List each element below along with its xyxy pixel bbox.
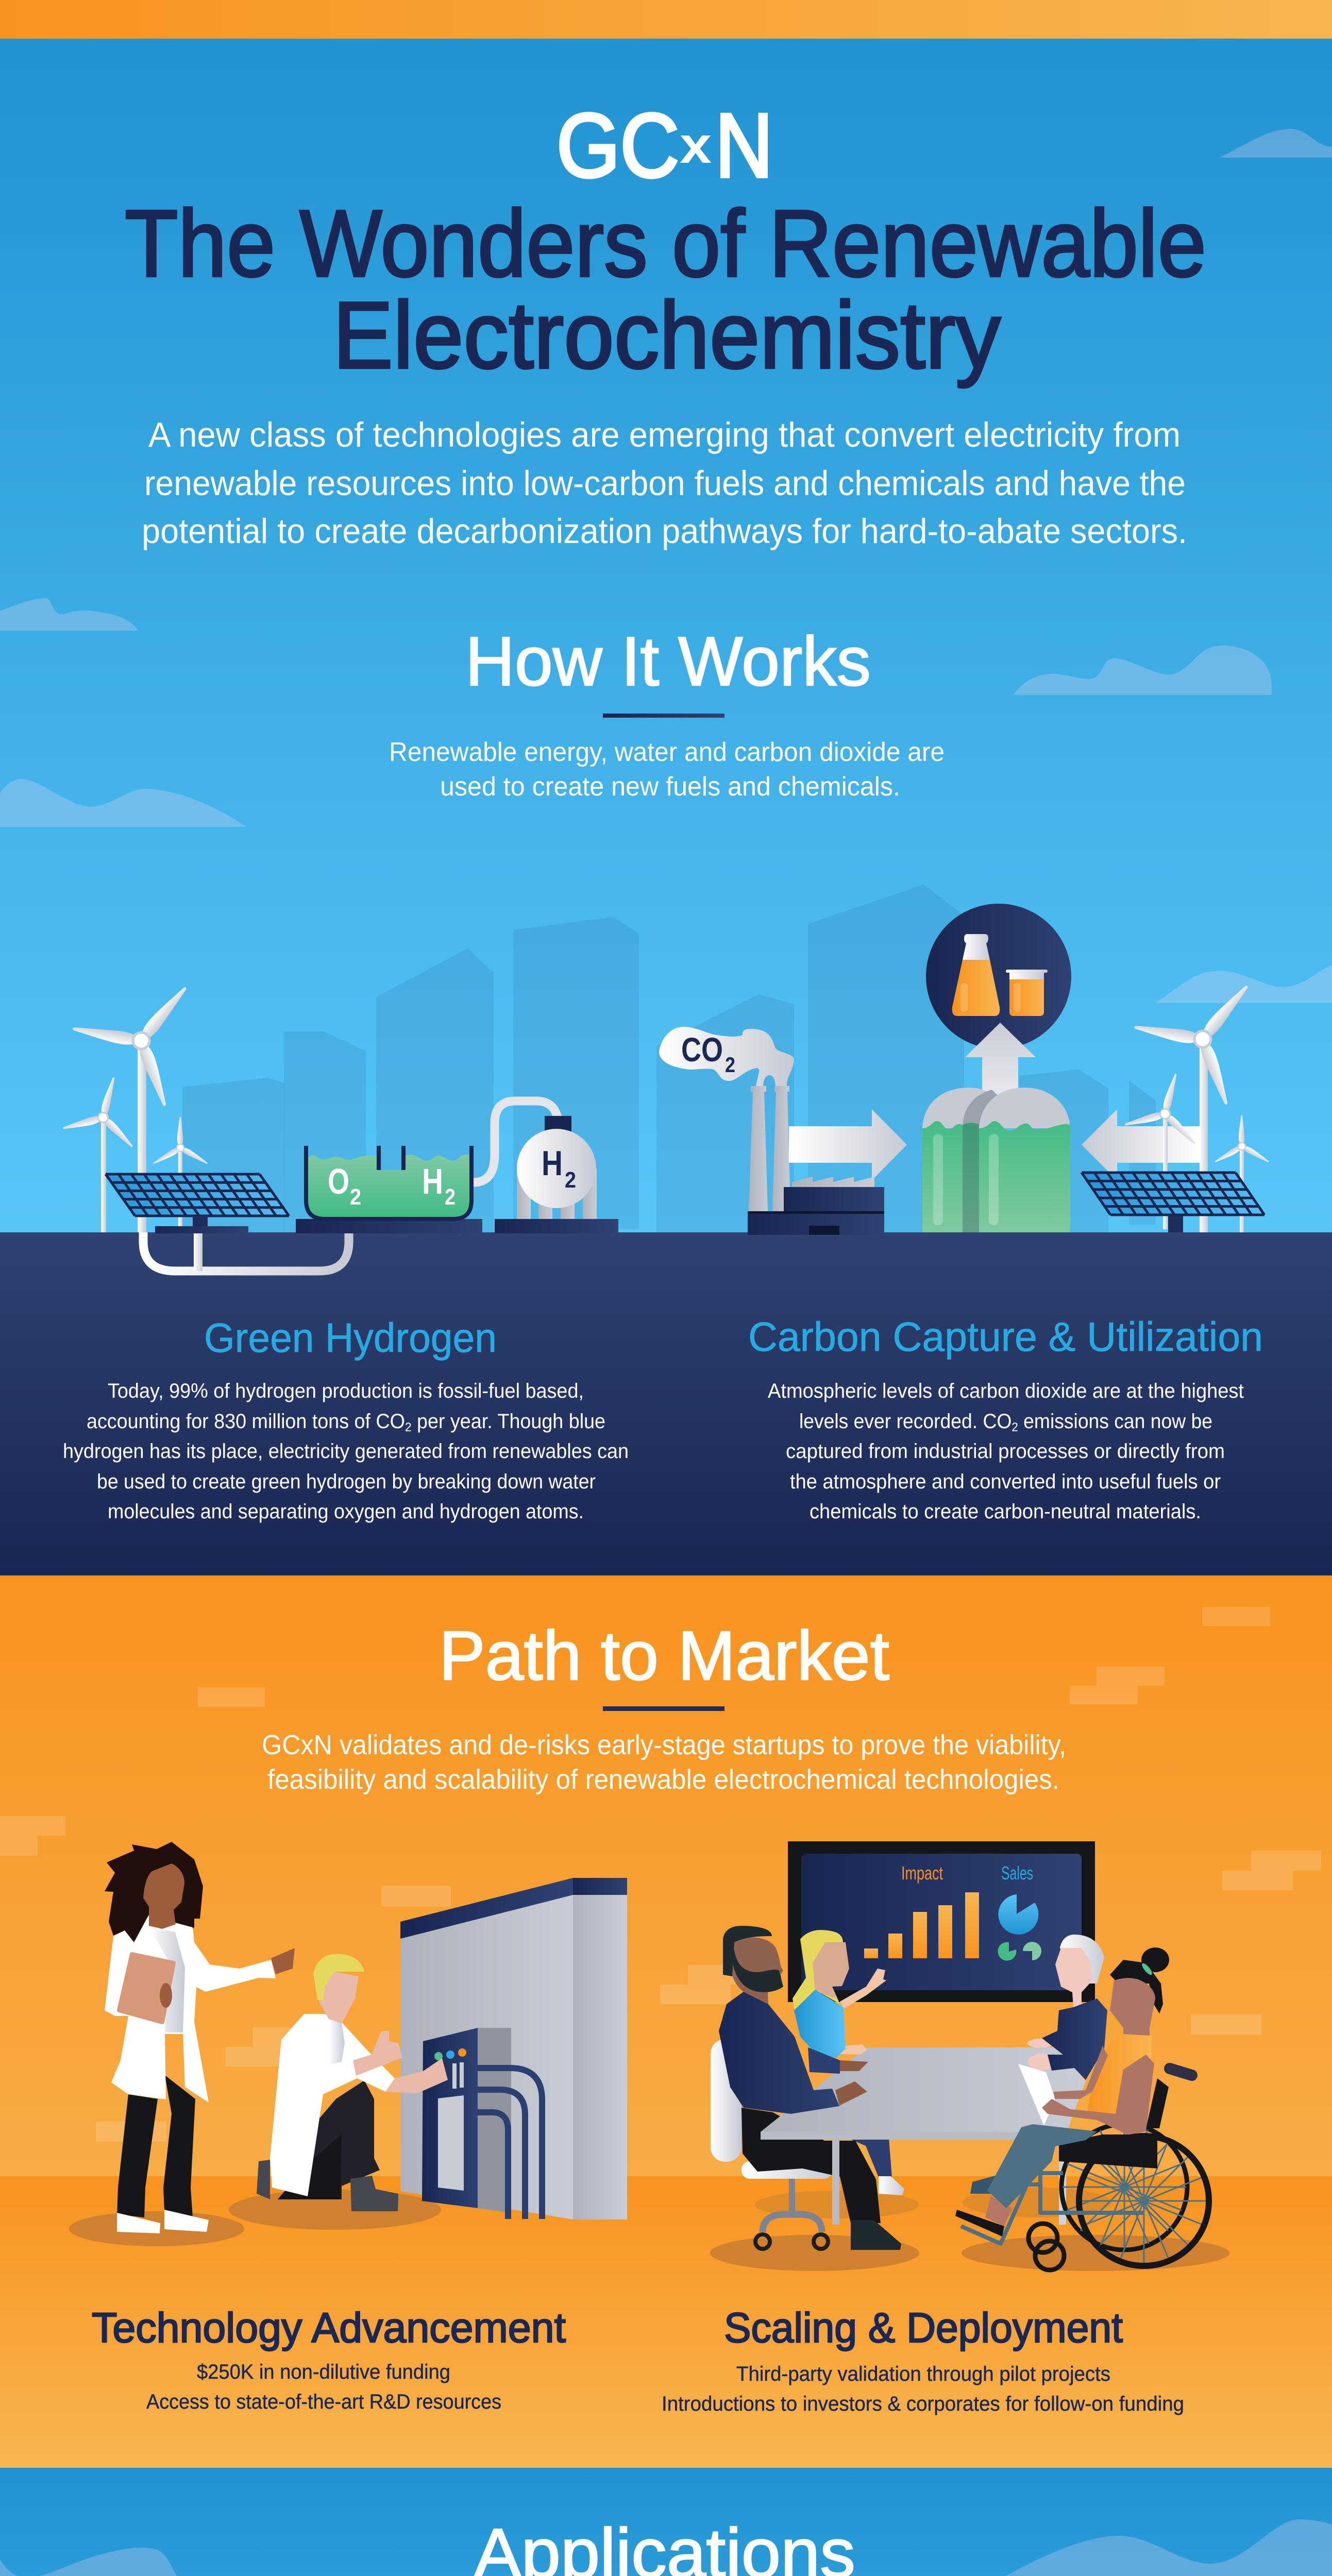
older man face [1055, 1948, 1092, 2007]
beaker [1006, 970, 1048, 973]
text: technology advancement: Access to state-of-the-art R&D resources [146, 2391, 501, 2413]
heading underline [603, 714, 724, 718]
pipes [478, 2068, 542, 2219]
back leg [970, 2148, 1055, 2194]
front arm [1042, 2055, 1154, 2134]
label: O2: O [328, 1161, 349, 1201]
older man hair [1060, 1935, 1104, 1984]
logo: N [715, 95, 773, 196]
icon: left wind turbines [60, 947, 234, 1232]
shoes [117, 2210, 209, 2233]
ground block [0, 1232, 1332, 1575]
chimneys [749, 1086, 790, 1211]
icon: underground pipe [143, 1232, 349, 1271]
front shoe [350, 2176, 398, 2211]
clouds [0, 129, 1332, 1003]
machine front [400, 1878, 573, 2219]
head [1110, 1978, 1155, 2036]
figure: standing scientist [69, 1842, 295, 2246]
text: carbon capture: emissions can now be [1018, 1410, 1212, 1433]
figure: meeting group [710, 1926, 1229, 2271]
arrow: into reactor from right [1082, 1109, 1201, 1180]
top accent bar [0, 0, 1332, 39]
text: carbon capture: 2 [1011, 1420, 1018, 1434]
blonde woman top [794, 1990, 846, 2058]
chair back [711, 2039, 741, 2162]
CO2 smoke [659, 1027, 794, 1087]
hair [313, 1954, 364, 2000]
icon: right solar panel [1082, 1173, 1264, 1232]
heading: carbon capture: Carbon Capture & Utilization [748, 1314, 1263, 1360]
text: green hydrogen: accounting for 830 million tons of CO [87, 1410, 425, 1433]
electrodes [379, 1146, 403, 1170]
panel: applications [0, 2468, 1332, 2576]
back arm [1053, 2046, 1108, 2099]
wheelchair casters [1028, 2224, 1064, 2270]
panel: intro and how it works [0, 39, 1332, 1232]
man shadow [229, 2190, 441, 2230]
chair stem [789, 2179, 795, 2214]
text: green hydrogen [63, 1380, 629, 1523]
reaching arm [385, 2058, 448, 2093]
pipe to storage [474, 1101, 558, 1182]
older man torso [1042, 1998, 1107, 2080]
logo [557, 95, 773, 196]
middle liquid [963, 1123, 979, 1232]
subheading [262, 1730, 1066, 1795]
table [761, 2047, 1086, 2132]
label: sales: Sales [1001, 1862, 1033, 1884]
highlights [933, 1134, 943, 1225]
wall [0, 1575, 1332, 2176]
factory roof [792, 1177, 874, 1187]
shadow [69, 2211, 244, 2246]
figure: kneeling scientist [257, 1954, 448, 2211]
label: CO2: CO [681, 1030, 723, 1069]
blonde woman hair [793, 1930, 843, 2010]
shoe [955, 2210, 1004, 2236]
label: impact: Impact [901, 1862, 943, 1884]
icon: electrolysis tank: 2 [445, 1184, 456, 1210]
sky background [0, 2468, 1332, 2576]
text: green hydrogen: per year. Though blue [412, 1410, 605, 1433]
heading: green hydrogen: Green Hydrogen [204, 1315, 497, 1361]
heading: how it works: How It Works [465, 622, 871, 700]
coat [105, 1916, 276, 2103]
icon: reactor with up arrow [922, 1023, 1070, 1232]
icon: right wind turbines [1082, 945, 1296, 1232]
wheelchair spokes [1063, 2125, 1206, 2263]
icon: co2 factory [659, 1027, 907, 1235]
lower leg [278, 2134, 342, 2199]
subheading [389, 737, 945, 802]
icon: electrolysis tank [296, 1146, 482, 1233]
cap [545, 1116, 571, 1131]
right liquid [979, 1121, 1070, 1232]
pants [117, 2075, 195, 2217]
text: technology advancement: $250K in non-dilutive funding [197, 2361, 450, 2383]
legs [517, 1168, 597, 1220]
subheading: GCxN validates and de-risks early-stage startups to prove the viability, [262, 1730, 1066, 1760]
decorative bricks [0, 1607, 1321, 2142]
logo: x [680, 116, 712, 174]
blonde woman shoe [879, 2176, 904, 2195]
blonde woman arm [840, 1969, 886, 2009]
icon: hydrogen storage tank [474, 1101, 618, 1233]
front leg [987, 2124, 1097, 2208]
blonde woman face [813, 1942, 849, 1998]
text: green hydrogen: molecules and separating oxygen and hydrogen atoms. [108, 1500, 584, 1523]
chair base [763, 2214, 822, 2232]
subheading: Renewable energy, water and carbon dioxide are [389, 737, 945, 767]
raised arm [353, 2031, 402, 2076]
tank platform [296, 1219, 482, 1233]
intro paragraph: A new class of technologies are emerging that convert electricity from [148, 415, 1181, 454]
label: H2: H [422, 1161, 443, 1201]
man hands [835, 2060, 868, 2106]
shirt [329, 2021, 345, 2065]
text: carbon capture: captured from industrial processes or directly from [786, 1440, 1225, 1463]
panel: green hydrogen and carbon text ground [0, 1232, 1332, 1575]
foot [985, 2196, 1012, 2226]
text: scaling and deployment: Third-party validation through pilot projects [736, 2363, 1110, 2385]
icon: left solar panel [106, 1174, 289, 1233]
paper [1018, 2064, 1055, 2126]
chair seat [741, 2161, 832, 2179]
factory building [784, 1187, 884, 1211]
text: green hydrogen: Today, 99% of hydrogen production is fossil-fuel based, [108, 1380, 584, 1402]
text: carbon capture: levels ever recorded. CO [799, 1410, 1027, 1433]
sky background [0, 39, 1332, 1232]
text: carbon capture: Atmospheric levels of carbon dioxide are at the highest [768, 1380, 1244, 1402]
wheelchair seat and back [1059, 2078, 1169, 2168]
text: technology advancement [146, 2361, 501, 2413]
heading underline [603, 1706, 724, 1711]
text: carbon capture: chemicals to create carbon-neutral materials. [810, 1500, 1201, 1523]
man beard [732, 1950, 783, 1992]
dome shadow [963, 1090, 1005, 1128]
label: H2: H [542, 1144, 563, 1183]
icon: co2 factory: 2 [725, 1053, 735, 1077]
panel: path to market [0, 1575, 1332, 2468]
face [319, 1972, 359, 2024]
man pants [741, 2108, 881, 2223]
wheelchair front wheel [1079, 2136, 1209, 2266]
hair tie [1140, 1962, 1154, 1976]
clouds [0, 2519, 1332, 2576]
icon: electrolysis tank: 2 [350, 1184, 361, 1210]
bar chart [864, 1892, 979, 1958]
machine side [573, 1878, 627, 2219]
blonde woman hand [840, 2044, 867, 2055]
control panel [422, 2028, 478, 2208]
heading: path to market: Path to Market [439, 1617, 889, 1694]
hair [105, 1842, 203, 1944]
man torso [719, 1992, 839, 2114]
panel buttons [434, 2048, 466, 2089]
icon: product bubble [926, 904, 1071, 1049]
table legs [832, 2140, 839, 2225]
intro paragraph: potential to create decarbonization pathways for hard-to-abate sectors. [142, 512, 1187, 551]
floor shadows [710, 2188, 1229, 2271]
recess [478, 2028, 511, 2213]
title: The Wonders of Renewable [125, 190, 1206, 296]
heading: scaling and deployment: Scaling & Deployment [724, 2304, 1123, 2351]
icon: presentation screen [788, 1841, 1095, 2002]
text: carbon capture: the atmosphere and converted into useful fuels or [790, 1470, 1221, 1493]
panel window [438, 2095, 464, 2191]
text: carbon capture [768, 1380, 1244, 1523]
chair wheels [755, 2234, 828, 2249]
hair [1110, 1960, 1163, 2013]
arrow: up [965, 1023, 1036, 1095]
logo: GC [557, 95, 679, 196]
flask [963, 934, 990, 960]
pie charts [998, 1894, 1041, 1961]
hands [160, 1983, 172, 2008]
orange top [1087, 2034, 1152, 2114]
text: green hydrogen: 2 [405, 1420, 412, 1434]
shirt [149, 1927, 185, 2032]
clipboard [119, 1954, 174, 2022]
coat [270, 2014, 395, 2196]
background skyline [182, 885, 1156, 1232]
title [125, 190, 1206, 388]
hair bun [1141, 1947, 1169, 1972]
man shoe [851, 2220, 901, 2250]
icon: hydrogen storage tank: 2 [565, 1167, 576, 1193]
man back arm [808, 2047, 840, 2074]
wheelchair frame [961, 2173, 1144, 2244]
title: Electrochemistry [333, 282, 1001, 388]
icon: lab machine [229, 1878, 627, 2230]
tank liquid [307, 1155, 471, 1219]
floor [0, 2176, 1332, 2468]
left liquid [922, 1121, 963, 1232]
man hair [723, 1926, 772, 1976]
knee [278, 2080, 380, 2199]
left dome [922, 1088, 1010, 1128]
heading: technology advancement: Technology Advancement [92, 2304, 566, 2351]
older man hands [1027, 2039, 1056, 2070]
text: scaling and deployment [662, 2363, 1184, 2415]
blonde woman legs [848, 2138, 892, 2177]
back shoe [257, 2160, 270, 2199]
arrow: into reactor [789, 1109, 907, 1180]
sphere [517, 1129, 596, 1208]
platform [495, 1219, 618, 1233]
subheading: feasibility and scalability of renewable electrochemical technologies. [267, 1764, 1059, 1795]
text: scaling and deployment: Introductions to investors & corporates for follow-on funding [662, 2393, 1184, 2415]
intro paragraph: renewable resources into low-carbon fuels and chemicals and have the [144, 464, 1186, 503]
wheelchair handle [1170, 2069, 1192, 2075]
wheelchair back wheel [1061, 2124, 1187, 2250]
subheading: used to create new fuels and chemicals. [440, 772, 900, 802]
face [143, 1863, 184, 1929]
man head [729, 1938, 783, 2004]
intro paragraph [142, 415, 1187, 551]
text: green hydrogen: hydrogen has its place, electricity generated from renewables can [63, 1440, 629, 1463]
text: green hydrogen: be used to create green hydrogen by breaking down water [97, 1470, 596, 1493]
tank vessel [306, 1146, 471, 1219]
right dome [979, 1088, 1070, 1128]
